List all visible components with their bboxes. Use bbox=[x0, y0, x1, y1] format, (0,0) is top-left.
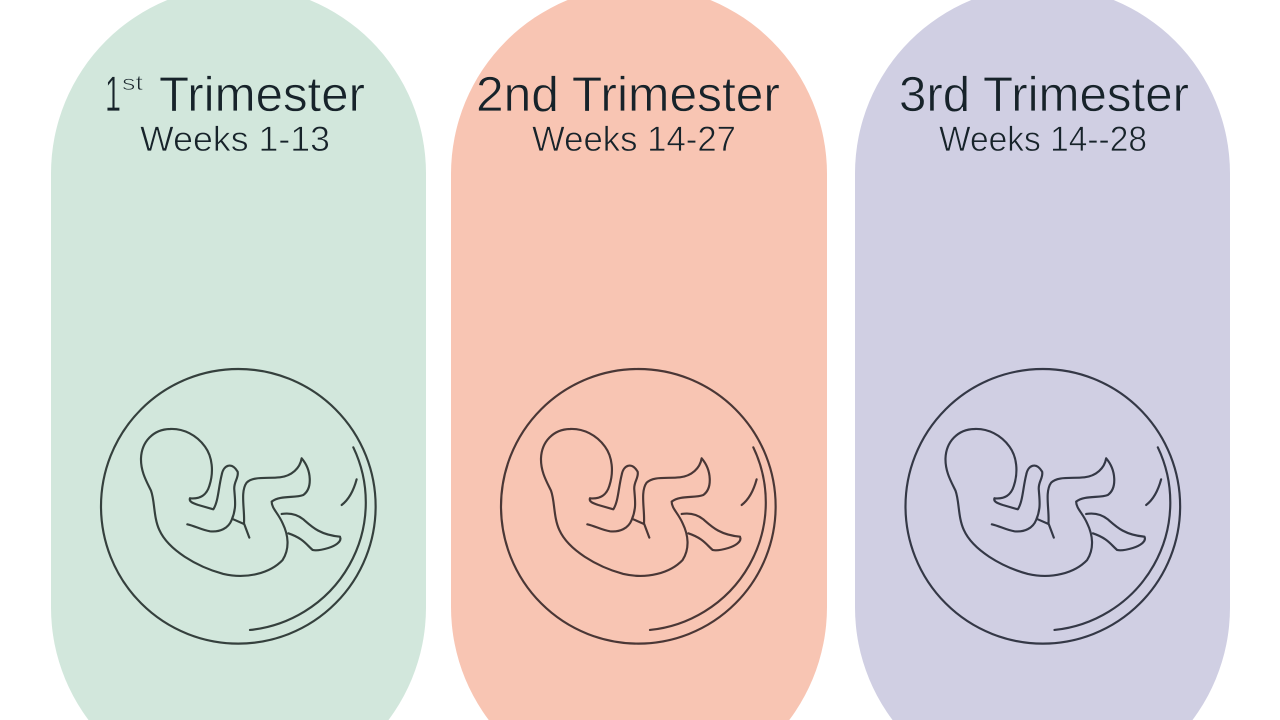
subheading: weeks 1-13: Weeks 1-13 bbox=[140, 120, 330, 159]
panel: second trimester bbox=[451, 0, 827, 720]
panel: first trimester bbox=[51, 0, 426, 720]
subheading: weeks 14-27: Weeks 14-27 bbox=[532, 120, 736, 159]
icon: fetus in womb bbox=[101, 369, 376, 644]
subheading: weeks 14-28: Weeks 14--28 bbox=[939, 120, 1147, 159]
panel: third trimester bbox=[855, 0, 1230, 720]
heading: 3rd Trimester: 3rd Trimester bbox=[899, 68, 1189, 122]
heading: 2nd Trimester: 2nd Trimester bbox=[476, 68, 780, 122]
heading: 1st Trimester: Trimester bbox=[159, 68, 365, 122]
icon: fetus in womb bbox=[501, 369, 776, 644]
heading: 1st Trimester: st bbox=[122, 72, 143, 95]
heading: 1st Trimester: 1 bbox=[105, 66, 121, 122]
icon: fetus in womb bbox=[905, 369, 1180, 644]
